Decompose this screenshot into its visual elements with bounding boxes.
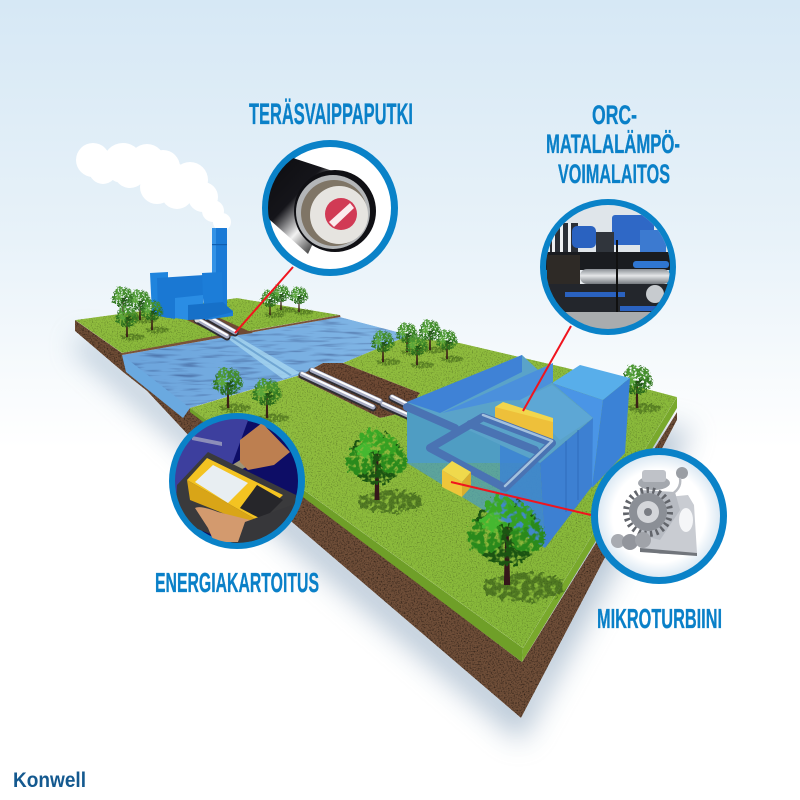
logo: Konwell: Konwell — [13, 769, 86, 792]
tree: lawn — [346, 429, 424, 513]
land block: main soil — [190, 410, 677, 718]
district pipes — [197, 312, 412, 418]
smoke cloud — [76, 143, 231, 231]
trees: centre group — [213, 319, 662, 422]
label: ORC low-temperature power plant: VOIMALAITOS — [558, 159, 670, 189]
pipe frame — [407, 407, 552, 488]
ORC plant building — [407, 355, 630, 548]
river — [122, 317, 405, 418]
tall block — [552, 365, 630, 488]
circle: microturbine — [594, 452, 724, 580]
yellow unit: ORC module — [495, 402, 553, 440]
land block: main grass top — [190, 337, 677, 662]
label: steel jacket pipe: TERÄSVAIPPAPUTKI — [249, 98, 413, 131]
label: ORC low-temperature power plant: ORC- — [592, 100, 637, 130]
circle: steel jacket pipe — [255, 144, 394, 272]
label: energy survey: ENERGIAKARTOITUS — [155, 567, 319, 598]
trees: back left group — [112, 284, 313, 340]
label: ORC low-temperature power plant: MATALALÄMPÖ- — [546, 129, 680, 159]
circle: handheld energy survey — [172, 415, 302, 546]
yellow unit: microturbine — [442, 461, 471, 497]
pipe trench: main land — [297, 363, 420, 418]
factory — [150, 228, 233, 320]
land block: factory side — [75, 298, 341, 437]
tree: front — [468, 495, 566, 602]
red callout lines — [235, 267, 591, 515]
circle: ORC plant photo — [544, 202, 672, 332]
ground shadow — [72, 335, 692, 742]
pipe trench: factory side — [187, 315, 253, 337]
